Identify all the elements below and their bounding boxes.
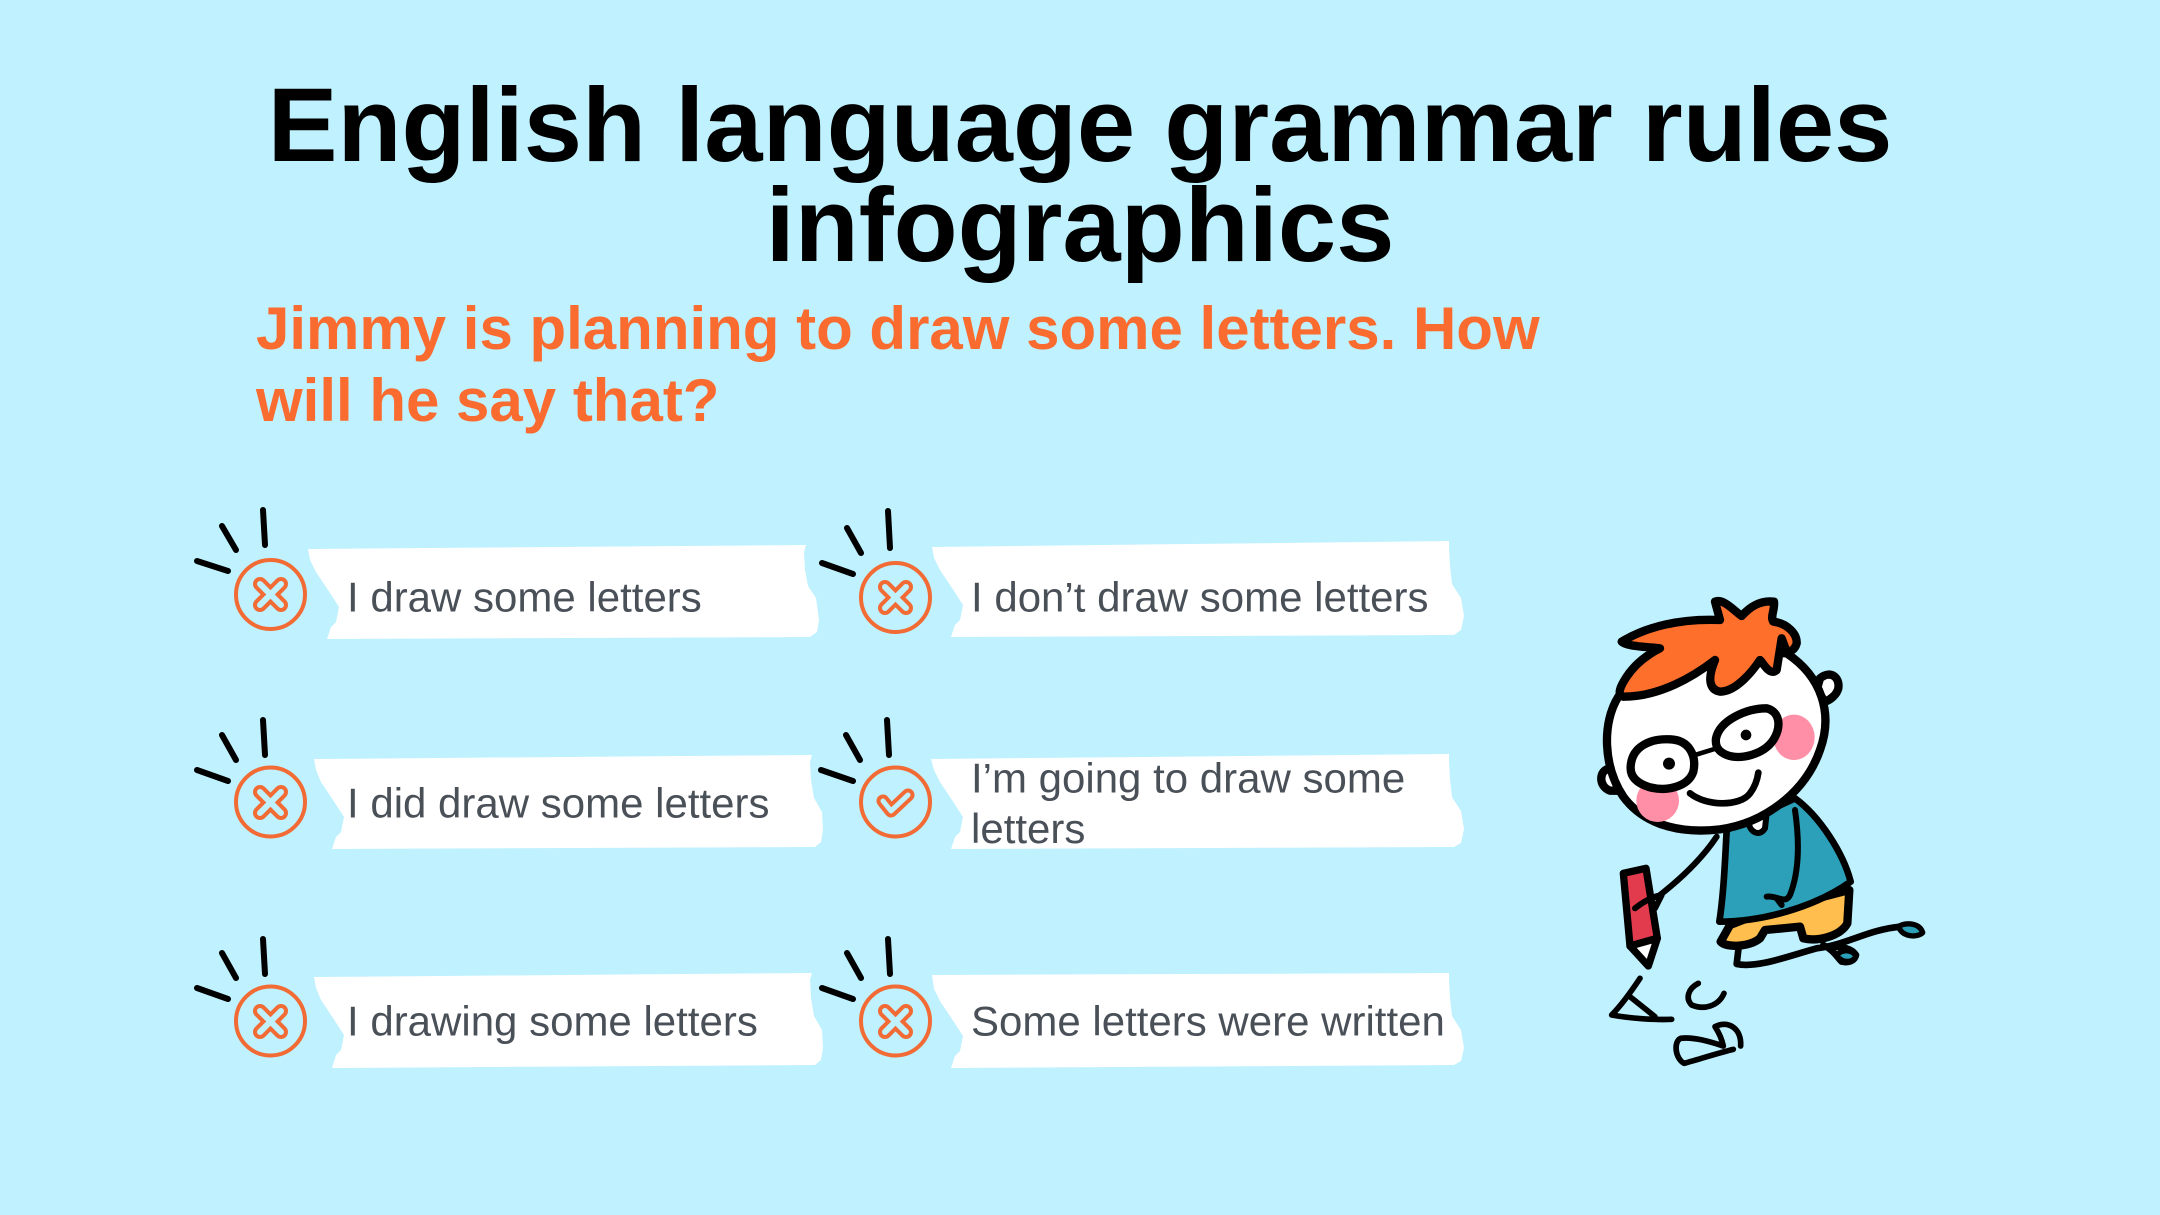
answer option: I'm going to draw some letters (correct): I’m going to draw some xyxy=(971,754,1405,802)
answer option: Some letters were written (wrong) xyxy=(822,939,1464,1068)
hand on pencil xyxy=(1635,895,1662,908)
teal shirt xyxy=(1719,798,1851,922)
ear right xyxy=(1817,675,1839,702)
answer option: I drawing some letters (wrong) xyxy=(197,939,823,1068)
arm xyxy=(1660,837,1717,895)
answer option: Some letters were written (wrong): Some letters were written xyxy=(971,998,1445,1044)
red pencil xyxy=(1623,868,1657,946)
title: English language grammar rules xyxy=(268,67,1892,184)
smile xyxy=(1690,773,1758,803)
shirt sleeve and hand xyxy=(1767,810,1798,905)
glasses bridge xyxy=(1695,748,1717,755)
legs and trailing shoelace xyxy=(1737,927,1900,965)
letter B xyxy=(1676,1024,1741,1063)
illustration: boy with glasses drawing letters xyxy=(1601,601,1923,1063)
letter C xyxy=(1688,983,1724,1007)
subtitle question: Jimmy is planning to draw some letters. How xyxy=(256,295,1540,362)
answer option: I don't draw some letters (wrong) xyxy=(822,511,1464,637)
pink cheeks xyxy=(1636,715,1815,822)
subtitle question: will he say that? xyxy=(255,367,719,434)
answer option: I'm going to draw some letters (correct): letters xyxy=(971,805,1085,852)
answer option: I'm going to draw some letters (correct) xyxy=(821,720,1464,852)
answer option: I draw some letters (wrong): I draw some letters xyxy=(347,574,702,620)
teal shoe tips xyxy=(1837,924,1923,961)
answer option: I don't draw some letters (wrong): I don’t draw some letters xyxy=(971,574,1429,620)
letter A xyxy=(1612,978,1672,1019)
title: infographics xyxy=(766,167,1394,284)
answer option: I draw some letters (wrong) xyxy=(197,510,819,639)
ear left xyxy=(1601,768,1627,791)
orange hair xyxy=(1620,601,1797,697)
eyes xyxy=(1663,730,1751,770)
answer option: I did draw some letters (wrong) xyxy=(197,720,823,849)
left glasses lens xyxy=(1631,739,1694,789)
yellow shorts xyxy=(1721,890,1849,946)
head xyxy=(1607,647,1825,831)
pencil tip xyxy=(1630,938,1657,966)
answer option: I drawing some letters (wrong): I drawing some letters xyxy=(347,998,758,1044)
answer option: I did draw some letters (wrong): I did draw some letters xyxy=(347,780,770,826)
right glasses lens xyxy=(1716,708,1778,757)
white collar xyxy=(1748,813,1767,833)
